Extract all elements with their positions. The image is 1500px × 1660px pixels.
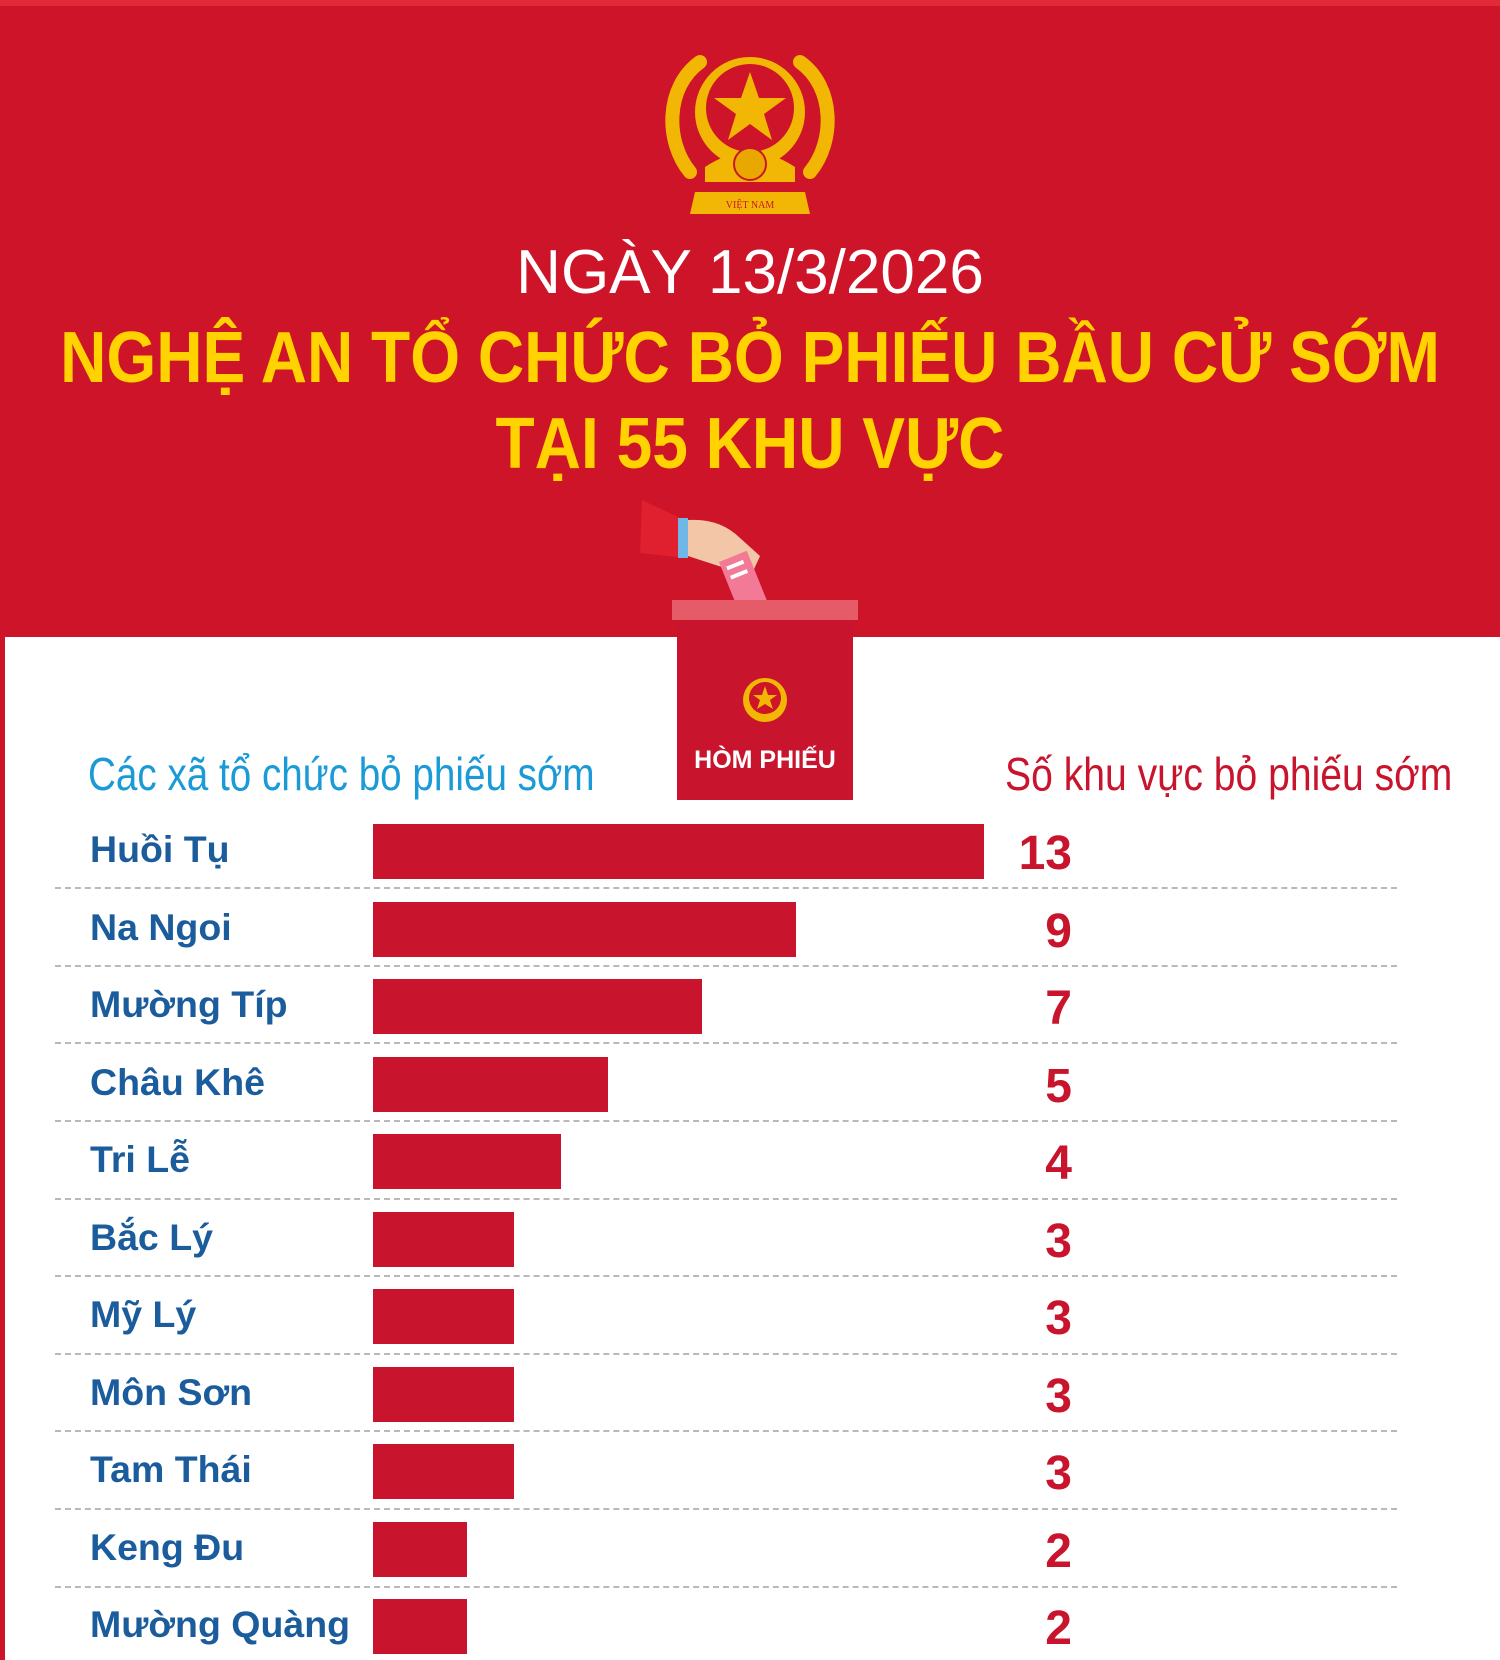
title: TẠI 55 KHU VỰC [496,404,1004,484]
row: Mường Típ [90,979,1072,1035]
row: Na Ngoi [90,902,1072,958]
row: Tri Lễ: 4 [1045,1137,1072,1190]
row: Bắc Lý [90,1212,1072,1268]
row: Châu Khê: Châu Khê [90,1061,265,1103]
row: Môn Sơn: Môn Sơn [90,1371,252,1413]
row: Môn Sơn: 3 [1045,1370,1072,1423]
row: Mường Quàng: 2 [1045,1602,1072,1655]
title: NGHỆ AN TỔ CHỨC BỎ PHIẾU BẦU CỬ SỚM [60,318,1440,398]
row: Mường Quàng: Mường Quàng [90,1603,350,1645]
row: Mỹ Lý: Mỹ Lý [90,1293,196,1335]
row: Châu Khê [90,1057,1072,1113]
row: Môn Sơn [90,1367,1072,1423]
row: Mường Típ: Mường Típ [90,983,288,1025]
row: Tri Lễ [90,1134,1072,1190]
row: Tri Lễ: Tri Lễ [90,1138,190,1180]
icon: national emblem [665,55,835,214]
row: Huồi Tụ: 13 [1019,827,1072,880]
row: Châu Khê: 5 [1045,1060,1072,1113]
row: Bắc Lý: Bắc Lý [90,1216,213,1258]
icon: hand and ballot box [640,500,858,800]
icon: national emblem: VIỆT NAM [726,199,774,211]
row: Mường Típ: 7 [1045,982,1072,1035]
row: Tam Thái: 3 [1045,1447,1072,1500]
bar chart [55,824,1397,1655]
panel: chart area [5,637,1500,1660]
row: Mỹ Lý [90,1289,1072,1345]
date heading: NGÀY 13/3/2026 [516,238,984,307]
title [60,316,1440,484]
row: Tam Thái: Tam Thái [90,1448,252,1490]
row: Na Ngoi: 9 [1045,905,1072,958]
row: Keng Đu: 2 [1045,1525,1072,1578]
row: Keng Đu: Keng Đu [90,1526,244,1568]
row: Bắc Lý: 3 [1045,1215,1072,1268]
row: Na Ngoi: Na Ngoi [90,906,232,948]
row: Mường Quàng [90,1599,1072,1655]
icon: hand and ballot box: HÒM PHIẾU [694,744,836,774]
row: Keng Đu [90,1522,1072,1578]
heading: right column: Số khu vực bỏ phiếu sớm [1005,748,1452,800]
row: Huồi Tụ: Huồi Tụ [90,828,230,870]
row: Mỹ Lý: 3 [1045,1292,1072,1345]
row: Tam Thái [90,1444,1072,1500]
heading: left column: Các xã tổ chức bỏ phiếu sớm [88,748,595,800]
row: Huồi Tụ [90,824,1072,880]
header background [0,0,1500,6]
